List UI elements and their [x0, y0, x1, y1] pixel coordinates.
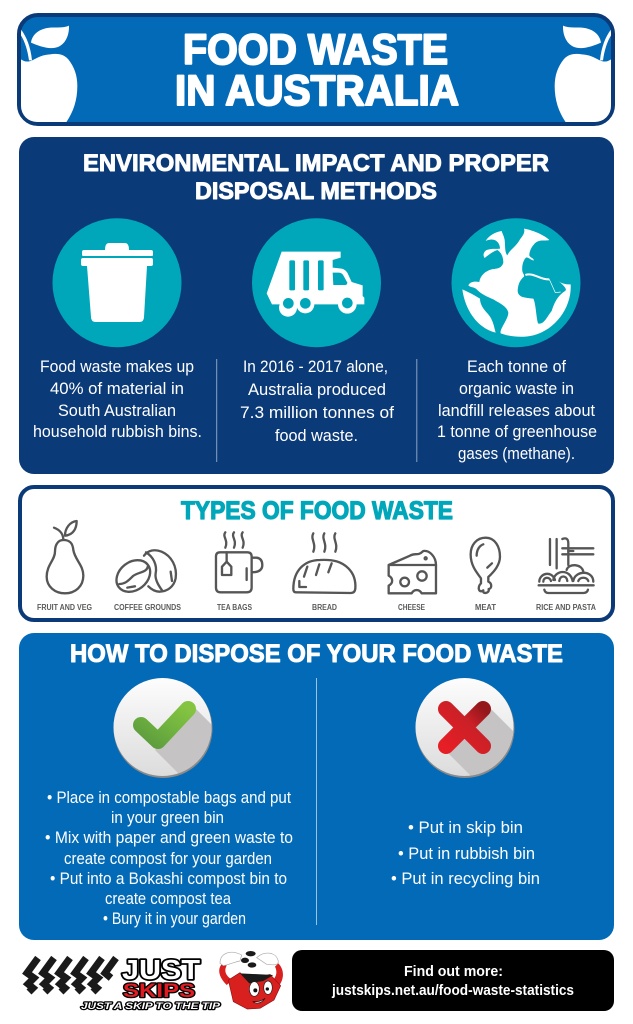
label: meat: MEAT: [475, 603, 496, 612]
label: bread: BREAD: [312, 603, 337, 612]
panel: environmental impact: [19, 137, 614, 474]
icon: drumstick: [471, 538, 500, 593]
icon: skip bin mascot: [219, 951, 283, 1009]
text: truck fact: In 2016 - 2017 alone,: [243, 357, 388, 376]
wordmark: JUST A SKIP TO THE TIP: [81, 1001, 221, 1012]
text: do list: • Place in compostable bags and put: [47, 788, 291, 807]
heading: environmental impact: ENVIRONMENTAL IMPACT AND PROPER: [83, 150, 549, 177]
text: do list: • Bury it in your garden: [103, 909, 246, 928]
icon: coffee beans: [110, 550, 176, 598]
label: coffee grounds: COFFEE GROUNDS: [114, 603, 182, 612]
label: fruit and veg: FRUIT AND VEG: [37, 603, 92, 612]
wordmark: JUST: [122, 954, 200, 985]
icon: left apple: [21, 26, 77, 123]
text: bin fact: [33, 357, 202, 441]
title: FOOD WASTE: [183, 26, 448, 74]
icon: globe: [452, 218, 580, 347]
text: do not list: • Put in rubbish bin: [398, 844, 535, 863]
label: cheese: CHEESE: [398, 603, 426, 612]
callout: find out more: justskips.net.au/food-waste-statistics: [331, 983, 574, 999]
text: globe fact: Each tonne of: [467, 357, 566, 376]
text: do not list: [391, 818, 540, 888]
icon: right apple: [555, 26, 611, 123]
text: globe fact: [437, 357, 597, 463]
text: globe fact: landfill releases about: [438, 401, 595, 420]
text: do not list: • Put in skip bin: [408, 818, 523, 837]
heading: how to dispose: HOW TO DISPOSE OF YOUR FOOD WASTE: [70, 640, 563, 668]
icon: rubbish bin: [52, 218, 182, 347]
label: rice and pasta: RICE AND PASTA: [536, 603, 596, 612]
callout: find out more: Find out more:: [404, 964, 503, 980]
icon: pear: [47, 521, 83, 593]
icon: green tick: [114, 678, 212, 778]
text: do not list: • Put in recycling bin: [391, 869, 540, 888]
wordmark: [81, 954, 221, 1012]
text: do list: • Put into a Bokashi compost bin to: [50, 869, 287, 888]
panel: types of food waste: [20, 487, 613, 620]
text: do list: create compost for your garden: [64, 849, 272, 868]
text: globe fact: organic waste in: [459, 379, 574, 398]
text: bin fact: 40% of material in: [50, 379, 184, 398]
title: IN AUSTRALIA: [175, 67, 459, 115]
panel: how to dispose: [19, 633, 614, 940]
label: tea bags: TEA BAGS: [217, 603, 253, 612]
icon: tea mug: [216, 532, 262, 592]
text: globe fact: gases (methane).: [458, 444, 575, 463]
text: truck fact: Australia produced: [248, 380, 386, 399]
icon: rice and pasta: [539, 538, 594, 593]
text: truck fact: [240, 357, 394, 445]
text: do list: [45, 788, 293, 928]
text: bin fact: South Australian: [58, 401, 176, 420]
wordmark: SKIPS: [123, 981, 195, 1002]
callout: find out more: [292, 950, 614, 1011]
text: bin fact: household rubbish bins.: [33, 422, 202, 441]
heading: types of food waste: TYPES OF FOOD WASTE: [181, 497, 453, 525]
text: truck fact: food waste.: [275, 426, 358, 445]
text: bin fact: Food waste makes up: [40, 357, 194, 376]
heading: environmental impact: [83, 150, 549, 205]
text: do list: in your green bin: [111, 808, 224, 827]
icon: tyre tracks: [27, 958, 116, 992]
icon: bread: [293, 533, 355, 593]
heading: environmental impact: DISPOSAL METHODS: [195, 178, 437, 205]
text: do list: • Mix with paper and green waste to: [45, 828, 293, 847]
icon: garbage truck: [252, 218, 381, 347]
text: do list: create compost tea: [105, 889, 231, 908]
icon: cheese: [389, 551, 436, 593]
icon: red cross: [416, 678, 514, 778]
text: globe fact: 1 tonne of greenhouse: [437, 422, 597, 441]
title panel: [19, 15, 613, 124]
text: truck fact: 7.3 million tonnes of: [240, 403, 394, 422]
title: [175, 26, 459, 115]
logo: just skips: [27, 951, 283, 1012]
